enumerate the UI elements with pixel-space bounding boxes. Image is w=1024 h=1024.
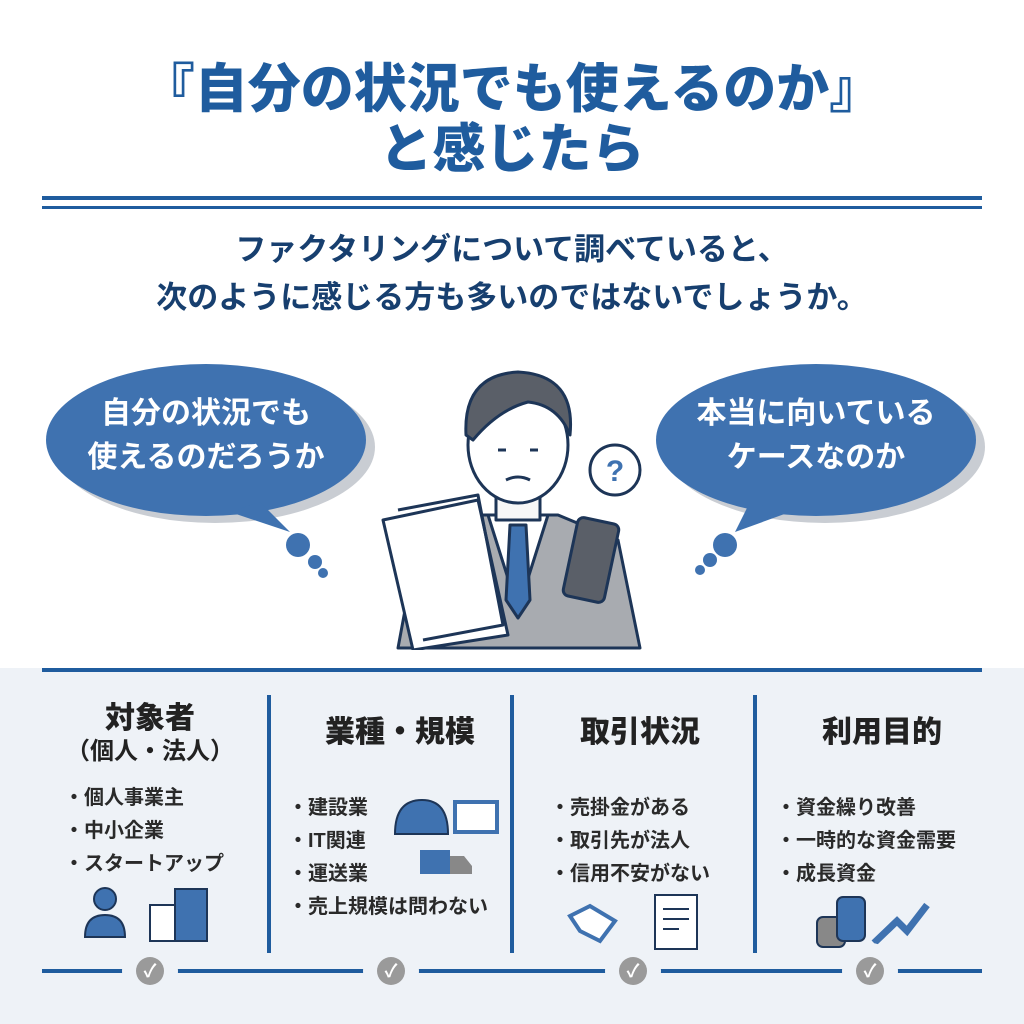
column: 取引状況: ・信用不安がない — [550, 863, 710, 885]
column: 利用目的: ・成長資金 — [776, 863, 876, 885]
column: 利用目的: 利用目的 — [822, 716, 942, 749]
illustration: businessman with document and phone: ? — [606, 455, 624, 488]
column: 取引状況: ・取引先が法人 — [550, 830, 690, 852]
bottom rule with check marks — [42, 969, 982, 973]
column: 利用目的: ・一時的な資金需要 — [776, 830, 956, 852]
illustration: businessman with document and phone — [382, 370, 642, 650]
text: ✓ — [143, 961, 156, 981]
speech bubble left — [46, 364, 375, 578]
column: 業種・規模 — [288, 716, 499, 918]
column: 対象者: ・スタートアップ — [64, 853, 224, 875]
title: 『自分の状況でも使えるのか』 — [142, 60, 882, 119]
column: 対象者 — [64, 702, 234, 942]
title — [142, 60, 882, 179]
text: ✓ — [863, 961, 876, 981]
intro text — [156, 232, 868, 315]
speech bubble left: 使えるのだろうか — [87, 441, 325, 474]
text: ✓ — [626, 961, 640, 981]
speech bubble right — [656, 364, 985, 575]
column: 利用目的 — [776, 716, 956, 948]
column: 業種・規模: ・売上規模は問わない — [288, 896, 488, 918]
column: 取引状況: ・売掛金がある — [550, 797, 690, 819]
speech bubble left: 自分の状況でも — [101, 397, 311, 430]
intro text: ファクタリングについて調べていると、 — [235, 232, 789, 267]
column: 業種・規模: 業種・規模 — [325, 716, 475, 749]
bottom background panel — [0, 668, 1024, 1024]
column: 取引状況: 取引状況 — [580, 716, 700, 749]
top rule of bottom section — [42, 668, 982, 672]
speech bubble right: 本当に向いている — [696, 397, 936, 430]
column: 業種・規模: ・IT関連 — [288, 830, 366, 852]
column: 利用目的: ・資金繰り改善 — [776, 797, 916, 819]
text: ✓ — [384, 961, 398, 981]
column: 業種・規模: ・運送業 — [288, 863, 368, 885]
column: 対象者: 対象者 — [105, 702, 195, 735]
column: 対象者: ・中小企業 — [64, 820, 164, 842]
intro text: 次のように感じる方も多いのではないでしょうか。 — [156, 280, 868, 315]
column: 対象者: （個人・法人） — [66, 738, 234, 765]
title double rule — [42, 196, 982, 209]
column: 業種・規模: ・建設業 — [288, 797, 368, 819]
speech bubble right: ケースなのか — [727, 441, 905, 474]
column: 対象者: ・個人事業主 — [64, 787, 184, 809]
column: 取引状況 — [550, 716, 710, 950]
title: と感じたら — [380, 120, 644, 179]
